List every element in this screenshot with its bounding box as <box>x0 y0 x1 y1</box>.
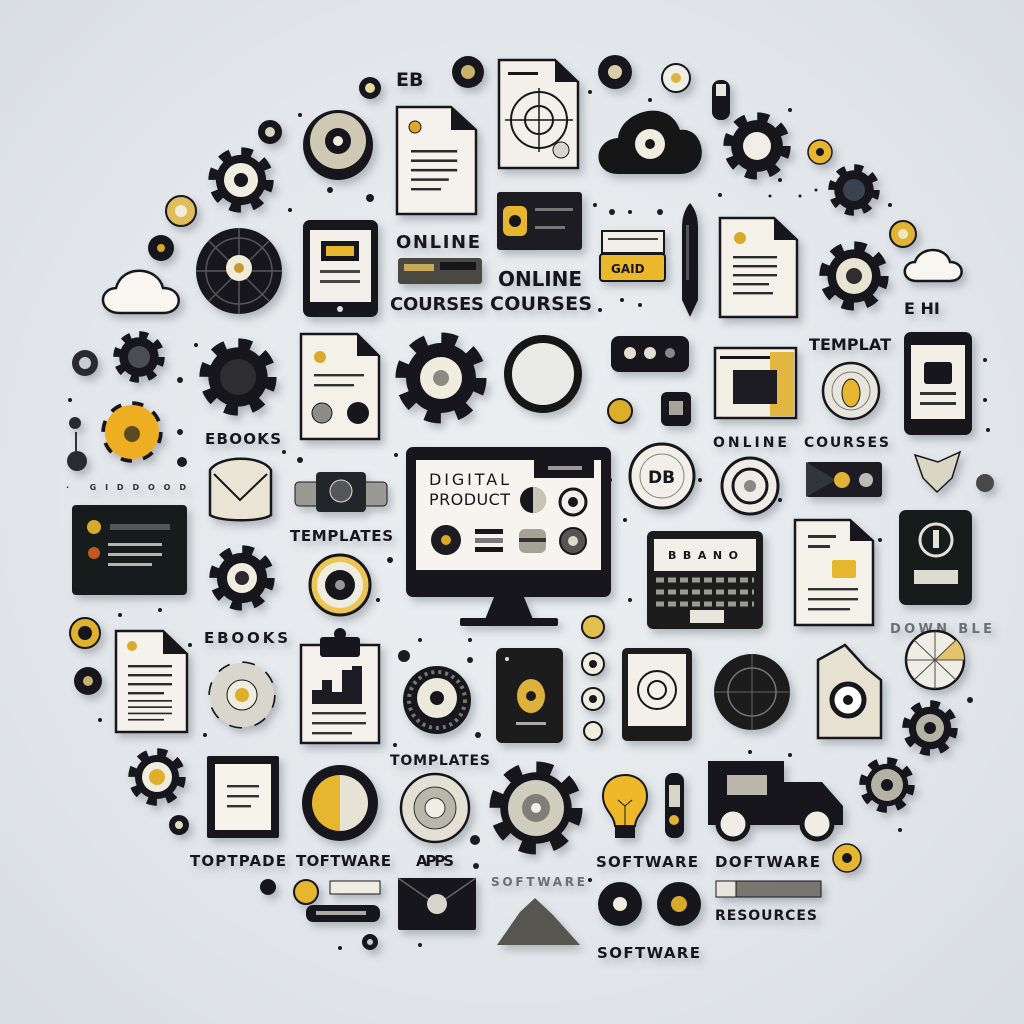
text: software row: SOFTWARE <box>596 853 698 871</box>
monitor: digital product <box>406 447 611 626</box>
document <box>397 107 476 214</box>
icon: circle left <box>72 350 98 376</box>
text: software row: DOFTWARE <box>715 853 820 871</box>
icon: silver gear <box>210 663 274 727</box>
text: software row: TOPTPADE <box>190 852 286 870</box>
icon: small gem <box>915 452 960 492</box>
text: software row: APPS <box>416 852 454 870</box>
icon: coin centre <box>608 399 632 423</box>
document with circles <box>301 334 379 439</box>
icon: small stack rings <box>582 616 604 740</box>
text: software row: TOFTWARE <box>296 852 391 870</box>
text: online courses left: ONLINE <box>396 232 480 253</box>
icon: large gear bottom <box>497 769 575 847</box>
icon: tablet right <box>904 332 972 435</box>
label: small tag: E HI <box>904 299 940 318</box>
icon: circle DB: DB <box>648 468 675 488</box>
icon: dark card <box>497 192 582 250</box>
icon: yellow pie disc <box>302 765 378 841</box>
text: online courses row <box>713 435 889 451</box>
icon: capsule vertical <box>665 773 684 838</box>
icon: small black badge <box>148 235 174 261</box>
icon: framed picture <box>715 348 796 418</box>
icon: coin bottom left <box>70 618 100 648</box>
icon: dark card with coins <box>806 462 882 497</box>
text: software bottom: SOFTWARE <box>597 944 700 962</box>
icon: gear lower right <box>906 704 954 752</box>
document right <box>720 218 797 317</box>
icon: laptop keyboard <box>647 531 763 629</box>
text: online courses row: ONLINE <box>713 435 787 451</box>
text: online courses row: COURSES <box>804 435 889 451</box>
icon: coin left <box>166 196 196 226</box>
icon: yellow ring lens <box>310 555 370 615</box>
icon: small ring <box>169 815 189 835</box>
icon: delivery truck <box>708 761 843 839</box>
icon: film disc <box>196 228 282 314</box>
icon: gear lower left <box>133 753 181 801</box>
icon: gear right <box>832 168 876 212</box>
icon: padlock tag <box>818 645 881 738</box>
icon: gear left <box>117 335 161 379</box>
chart clipboard <box>301 628 379 743</box>
text: ebooks 1: EBOOKS <box>205 430 281 448</box>
text: online courses right <box>490 267 592 315</box>
icon: dark panel <box>72 505 187 595</box>
icon: coin bottom right <box>833 844 861 872</box>
icon: yellow card: GAID <box>611 262 645 276</box>
heading: digital product: PRODUCT <box>429 490 510 509</box>
heading: digital product <box>429 470 510 509</box>
heading: digital product: DIGITAL <box>429 470 509 489</box>
icon: resource bars <box>716 881 821 897</box>
icon: ring small <box>74 667 102 695</box>
scattered dots <box>68 78 990 950</box>
icon: laptop keyboard: BBANO <box>668 549 738 562</box>
icon: envelope <box>210 459 271 520</box>
text: template: TEMPLAT <box>809 335 891 354</box>
text: ebooks 2: EBOOKS <box>204 629 288 647</box>
icon: yellow dial <box>823 363 879 419</box>
icon: yellow gear <box>105 405 159 459</box>
icon: bottom dots <box>362 934 378 950</box>
icon: silver dial <box>401 774 469 842</box>
icon: gear far right <box>863 761 911 809</box>
icon: small badge <box>661 392 691 426</box>
icon: dark device right <box>899 510 972 605</box>
top row small icons <box>359 55 730 120</box>
text: online courses left <box>390 232 484 315</box>
text: online courses right: ONLINE <box>498 267 582 291</box>
text: online courses right: COURSES <box>490 293 592 315</box>
icon: gear <box>205 344 271 410</box>
text: software faded: SOFTWARE <box>491 875 585 889</box>
icon: dark target disc <box>714 654 790 730</box>
label: EB: EB <box>396 69 423 91</box>
small text row: · GIDDOOD <box>66 483 186 492</box>
icon: gear middle left <box>214 550 270 606</box>
icon: segmented wheel <box>906 631 964 689</box>
icon: light bulb <box>603 775 647 838</box>
icon: small ring right <box>976 474 994 492</box>
icon: envelope black <box>398 878 476 930</box>
icon: pen <box>682 203 698 317</box>
text: online courses left: COURSES <box>390 294 484 315</box>
icon: cloud left <box>103 271 179 313</box>
icon: yellow card <box>600 231 665 281</box>
text: software row <box>190 852 820 871</box>
icon: tablet <box>303 220 378 317</box>
icon: large gear <box>402 339 480 417</box>
icons: two black discs <box>598 882 701 926</box>
icon: cloud <box>598 111 702 174</box>
text: templates bottom: TOMPLATES <box>390 753 490 769</box>
icon: gear right upper <box>825 247 883 305</box>
icon: gear upper left <box>213 152 269 208</box>
text: downloadable: DOWN BLE <box>890 622 992 637</box>
icon: coin right <box>890 221 916 247</box>
icon: cloud right <box>905 250 962 281</box>
icon: circle DB <box>630 444 694 508</box>
icon: mound <box>497 898 580 945</box>
document bottom-left <box>116 631 187 732</box>
icon: ring dial <box>722 458 778 514</box>
icon: gear top right <box>728 117 786 175</box>
icon: small ring <box>258 120 282 144</box>
icon: camera device <box>295 472 387 512</box>
icon: phone with bell <box>496 648 563 743</box>
text: resources: RESOURCES <box>715 908 817 924</box>
icon: left column dots <box>67 417 87 471</box>
icon: coin <box>808 140 832 164</box>
icon: magnifier ring <box>508 339 578 409</box>
document yellow <box>795 520 873 625</box>
icon: small left bottom items <box>260 879 380 922</box>
icon: tablet circle <box>622 648 692 741</box>
icon: capsule device <box>611 336 689 372</box>
icon: film reel <box>403 666 471 734</box>
document with crosshair <box>499 60 578 168</box>
text: templates: TEMPLATES <box>290 527 393 545</box>
icon: lens disc <box>303 110 373 180</box>
document frame <box>207 756 279 838</box>
